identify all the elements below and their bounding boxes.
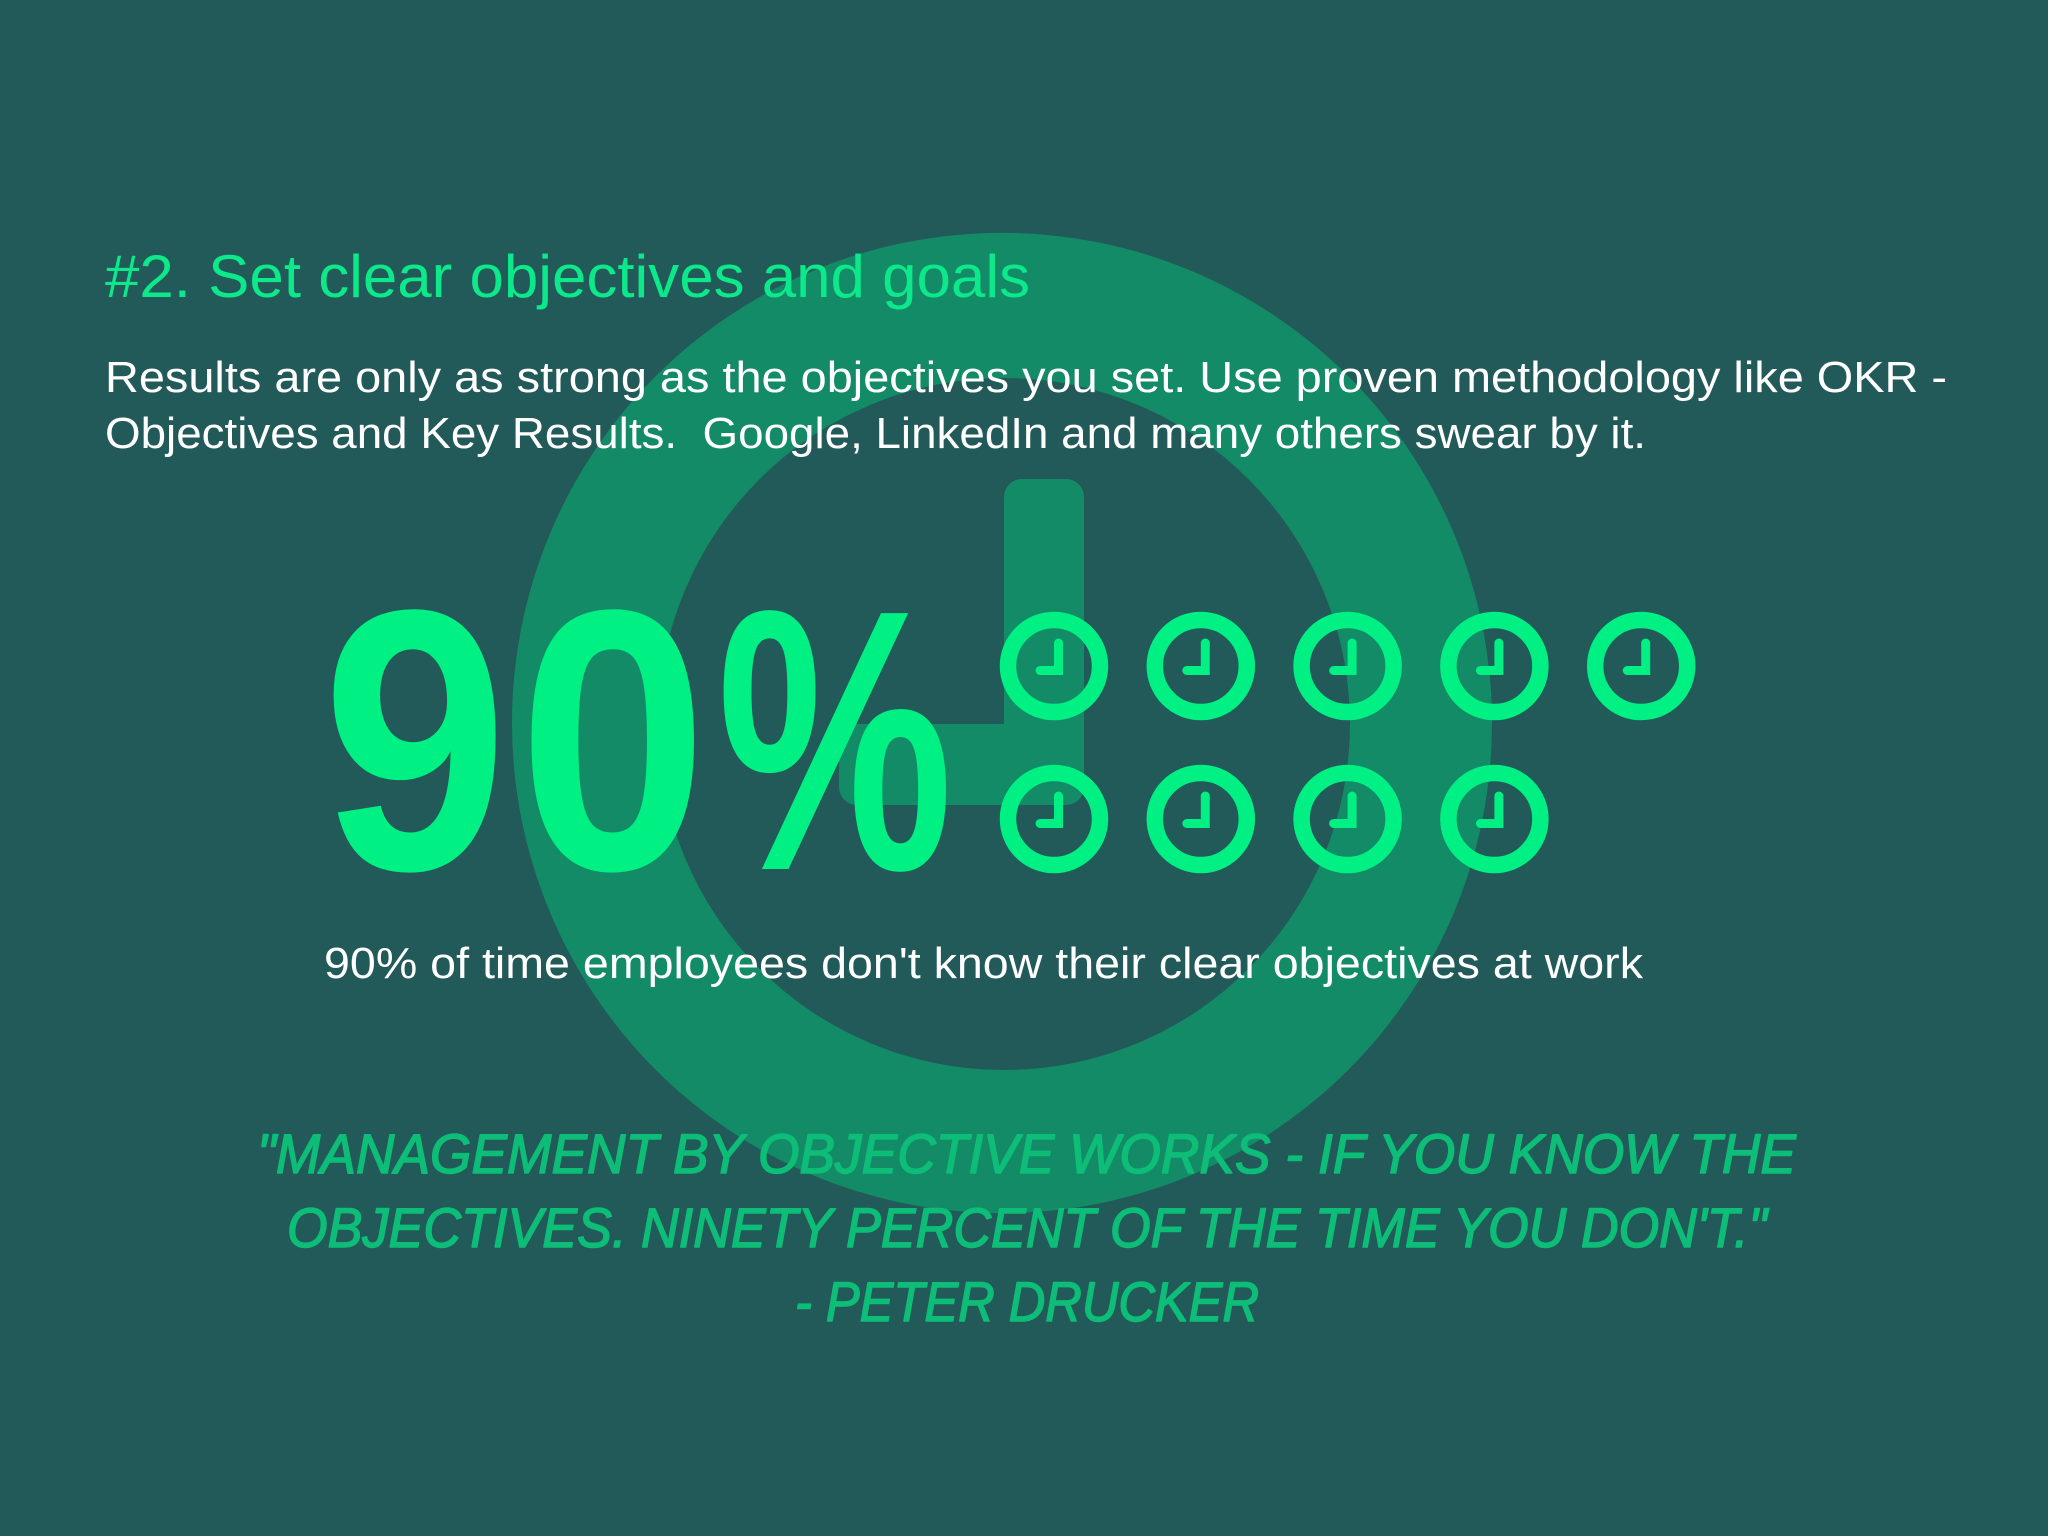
intro text block: Objectives and Key Results. Google, LinkedIn and many others swear by it. <box>105 409 1646 458</box>
intro text block: Results are only as strong as the objectives you set. Use proven methodology like OKR - <box>105 353 1947 402</box>
quote: - PETER DRUCKER <box>795 1270 1259 1333</box>
quote <box>257 1122 1797 1333</box>
big statistic: 90% <box>322 532 953 948</box>
big statistic: 90%: 9 <box>322 532 508 948</box>
intro text block <box>105 353 1947 458</box>
heading: #2. Set clear objectives and goals <box>105 243 1030 310</box>
icon row: nine clocks <box>1008 620 1687 865</box>
icon: large background clock <box>512 233 1492 1213</box>
big statistic: 90%: 0 <box>518 532 708 948</box>
big statistic: 90%: % <box>717 532 953 948</box>
quote: "MANAGEMENT BY OBJECTIVE WORKS - IF YOU KNOW THE <box>257 1122 1797 1185</box>
quote: OBJECTIVES. NINETY PERCENT OF THE TIME YOU DON'T." <box>287 1196 1769 1259</box>
statistic caption: 90% of time employees don't know their clear objectives at work <box>324 939 1644 988</box>
